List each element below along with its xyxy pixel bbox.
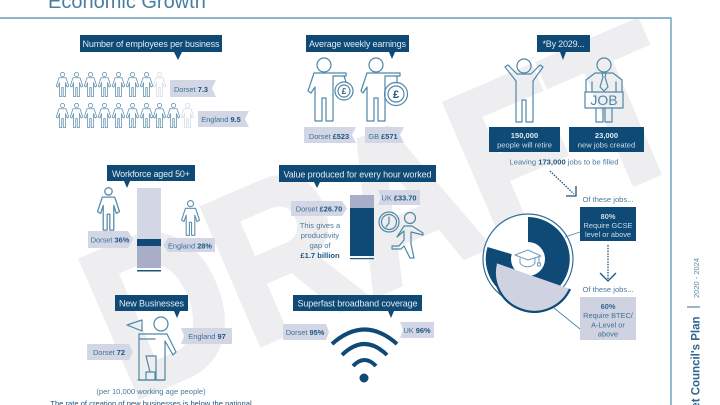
heading: by 2029: *By 2029... bbox=[542, 39, 584, 49]
stat box: 23,000 new jobs: new jobs created bbox=[578, 140, 635, 150]
icon: GB earner with money bag: £ bbox=[393, 89, 399, 101]
stat box: 23,000 new jobs bbox=[569, 127, 644, 152]
label: Dorset 7.3 bbox=[170, 80, 216, 97]
heading: new businesses bbox=[115, 295, 188, 318]
text: productivity gap: £1.7 billion bbox=[300, 251, 340, 260]
label: Dorset 95% bbox=[283, 324, 329, 340]
icon: Dorset earner with money bag: £ bbox=[342, 87, 347, 96]
chart: productivity bar bbox=[350, 195, 374, 259]
text: productivity gap bbox=[300, 221, 341, 260]
label: Dorset £523: Dorset £523 bbox=[309, 132, 349, 141]
label: England 28%: England 28% bbox=[168, 242, 212, 250]
icon: person holding job sign: JOB bbox=[590, 92, 618, 108]
text: leaving 173,000 jobs: Leaving 173,000 jobs to be filled bbox=[510, 158, 618, 166]
icon row: Dorset employees bbox=[56, 72, 166, 96]
icon row: England employees bbox=[56, 103, 194, 128]
panel: workforce aged 50+ bbox=[88, 165, 215, 272]
text: productivity gap: This gives a bbox=[300, 221, 341, 230]
text: of these jobs 1: Of these jobs... bbox=[582, 195, 634, 204]
panel: value per hour bbox=[279, 165, 436, 260]
label: GB £571: GB £571 bbox=[368, 132, 398, 141]
heading: broadband: Superfast broadband coverage bbox=[298, 298, 418, 308]
stat box: 60% BTEC: A-Level or bbox=[591, 320, 625, 330]
icon: running person and clock bbox=[379, 212, 423, 258]
heading: broadband bbox=[293, 295, 422, 318]
stat box: 23,000 new jobs: 23,000 bbox=[595, 131, 618, 140]
icon: England worker bbox=[182, 201, 200, 235]
icon: person holding job sign bbox=[585, 58, 623, 122]
text: of these jobs 2: Of these jobs... bbox=[582, 285, 634, 294]
stat box: 150,000 retire: people will retire bbox=[497, 140, 552, 150]
label: England 9.5 bbox=[198, 111, 249, 127]
icon: person with flag on step bbox=[127, 317, 176, 380]
stat box: 80% GCSE: level or above bbox=[585, 230, 631, 239]
label: Dorset 95%: Dorset 95% bbox=[286, 328, 325, 337]
panel: new businesses bbox=[50, 295, 252, 405]
text: productivity gap: productivity bbox=[301, 231, 339, 240]
text: productivity gap: gap of bbox=[309, 241, 331, 250]
label: UK £33.70 bbox=[378, 190, 420, 205]
stat box: 80% GCSE: 80% bbox=[601, 212, 616, 221]
heading: value bbox=[279, 165, 436, 188]
stat box: 150,000 retire bbox=[489, 127, 560, 152]
panel: broadband bbox=[283, 295, 434, 382]
icon: Dorset worker bbox=[98, 188, 120, 230]
label: England 97 bbox=[181, 328, 232, 344]
stat box: 60% BTEC bbox=[580, 297, 636, 340]
sidebar: plan title: 2020 - 2024 bbox=[692, 258, 701, 298]
stat box: 80% GCSE bbox=[580, 207, 636, 241]
label: UK 96% bbox=[400, 322, 434, 338]
icon: graduation cap bbox=[515, 250, 541, 267]
heading: employees bbox=[80, 35, 222, 60]
heading: workforce: Workforce aged 50+ bbox=[112, 169, 190, 179]
text: per 10,000: (per 10,000 working age people) bbox=[96, 387, 206, 396]
sidebar: plan title bbox=[687, 258, 702, 405]
label: Dorset 36%: Dorset 36% bbox=[91, 236, 130, 244]
stat box: 80% GCSE: Require GCSE bbox=[584, 221, 633, 230]
chart: qualifications pie bbox=[483, 214, 580, 329]
stat box: 60% BTEC: 60% bbox=[601, 302, 616, 311]
icon: wifi bbox=[332, 330, 397, 382]
label: Dorset £26.70: Dorset £26.70 bbox=[296, 204, 342, 214]
stat box: 60% BTEC: Require BTEC/ bbox=[583, 311, 634, 320]
stat box: 60% BTEC: above bbox=[598, 330, 618, 338]
label: England 97: England 97 bbox=[188, 332, 226, 341]
arrow: dotted diagonal bbox=[550, 171, 576, 196]
heading: value: Value produced for every hour worked bbox=[284, 170, 432, 180]
heading: earnings: Average weekly earnings bbox=[309, 39, 406, 49]
heading: new businesses: New Businesses bbox=[119, 298, 184, 308]
label: UK £33.70: UK £33.70 bbox=[382, 194, 416, 202]
label: Dorset 72: Dorset 72 bbox=[93, 348, 125, 357]
panel: weekly earnings bbox=[304, 35, 409, 143]
label: England 9.5: England 9.5 bbox=[201, 115, 241, 124]
icon: retiring person bbox=[505, 59, 543, 122]
panel: by 2029 bbox=[483, 35, 644, 340]
label: UK 96%: UK 96% bbox=[403, 326, 431, 335]
label: Dorset 7.3: Dorset 7.3 bbox=[174, 85, 208, 94]
chart: workforce bar bbox=[137, 188, 161, 272]
heading: employees: Number of employees per business bbox=[82, 39, 220, 49]
stat box: 150,000 retire: 150,000 bbox=[511, 131, 538, 140]
heading: by 2029 bbox=[537, 35, 590, 60]
arrow: dotted down bbox=[600, 245, 616, 281]
label: Dorset 72 bbox=[87, 344, 133, 360]
panel: employees per business bbox=[56, 35, 249, 128]
label: Dorset £26.70 bbox=[291, 201, 347, 216]
